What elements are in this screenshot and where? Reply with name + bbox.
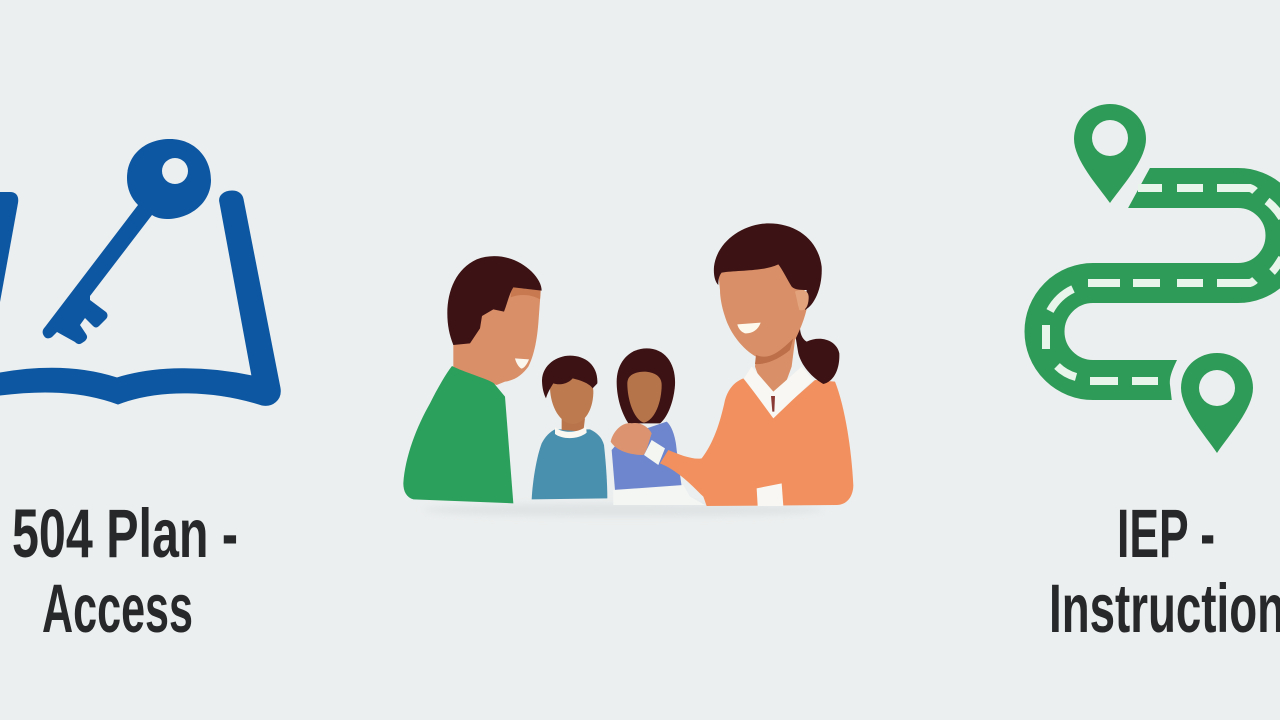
icon: end location pin <box>1181 353 1253 453</box>
figure: father <box>403 256 542 503</box>
figure: girl <box>612 348 705 505</box>
heading: 504 Plan - Access <box>12 495 238 647</box>
icon: book left page edge <box>0 192 18 302</box>
panel: IEP <box>1044 104 1280 647</box>
figure: boy <box>532 356 607 499</box>
heading: IEP - Instruction: IEP - <box>1117 495 1215 572</box>
panel: 504 plan <box>0 139 280 647</box>
icon: key <box>43 139 211 344</box>
table shadow <box>423 503 823 517</box>
icon: start location pin <box>1074 104 1146 203</box>
road top end cut <box>1105 166 1151 210</box>
figure: mother's hand and cuff <box>611 423 665 465</box>
panel: family illustration <box>403 223 853 517</box>
icon: open book <box>0 191 280 405</box>
heading: 504 Plan - Access: 504 Plan - <box>12 495 238 572</box>
icon: winding road <box>1044 166 1280 402</box>
figure: mother <box>660 223 853 506</box>
road bottom end cut <box>1170 358 1192 402</box>
heading: IEP - Instruction <box>1049 495 1280 647</box>
heading: 504 Plan - Access: Access <box>42 570 193 647</box>
road dashes <box>1046 188 1280 381</box>
